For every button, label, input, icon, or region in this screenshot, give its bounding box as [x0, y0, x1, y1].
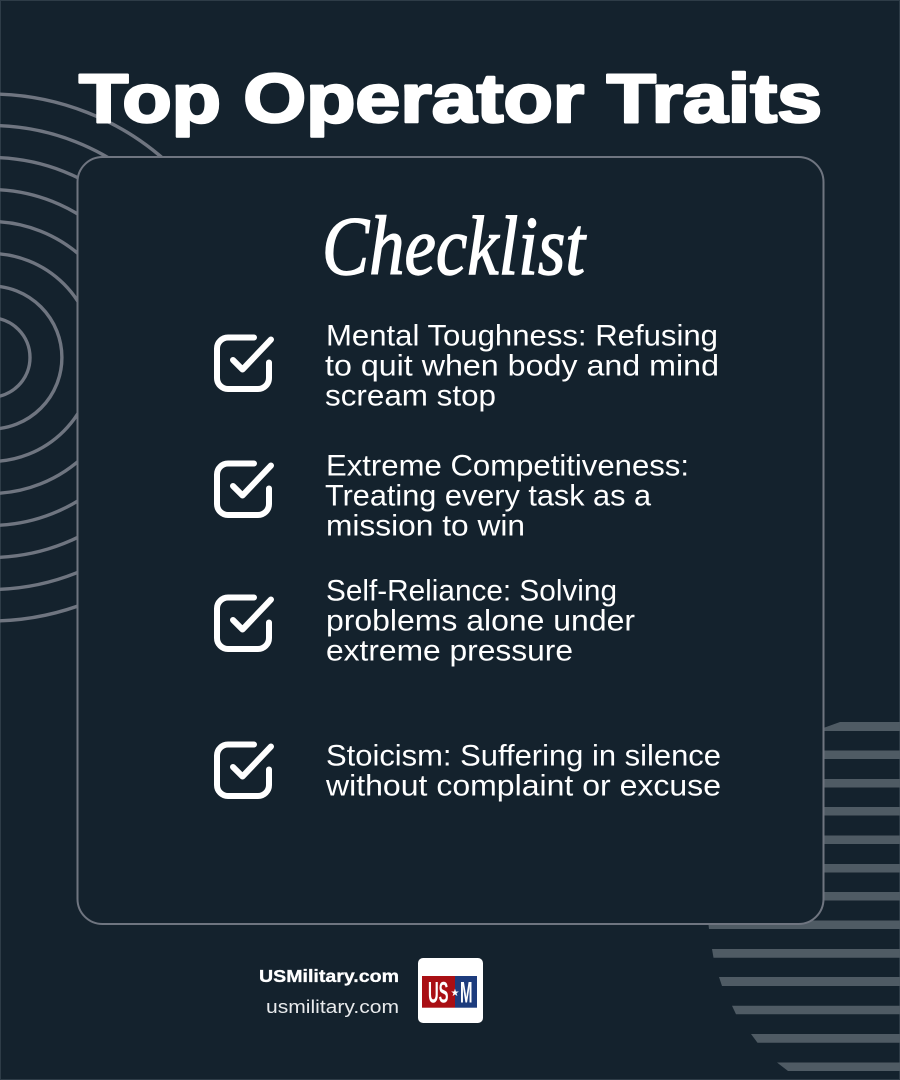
text: stoicism [325, 740, 721, 803]
icon: checkbox [217, 464, 271, 515]
text: mental toughness: to quit when body and mind [325, 350, 719, 383]
text: mental toughness: scream stop [325, 380, 496, 413]
text: self-reliance: problems alone under [326, 605, 635, 638]
text: extreme competitiveness: mission to win [326, 510, 525, 543]
text: extreme competitiveness: Extreme Competitiveness: [326, 450, 689, 483]
icon: checkbox [217, 598, 271, 649]
striped circle decoration [708, 722, 900, 1071]
text: stoicism: without complaint or excuse [325, 770, 721, 803]
text: mental toughness [325, 320, 719, 413]
item: stoicism [217, 740, 721, 803]
text: self-reliance: Self-Reliance: Solving [326, 575, 617, 608]
footer url: usmilitary.com [266, 997, 399, 1017]
title: Top Operator Traits [79, 60, 822, 137]
item: self-reliance [217, 575, 635, 668]
text: stoicism: Stoicism: Suffering in silence [326, 740, 721, 773]
checklist heading: Checklist [322, 200, 587, 293]
logo: US★M: US [428, 976, 448, 1010]
concentric arcs decoration [0, 94, 254, 621]
panel: checklist [78, 157, 824, 924]
icon: checkbox [217, 744, 271, 796]
item: mental toughness [217, 320, 719, 413]
text: extreme competitiveness [325, 450, 689, 543]
icon: checkbox [217, 338, 271, 389]
text: self-reliance: extreme pressure [326, 635, 573, 668]
text: extreme competitiveness: Treating every task as a [325, 480, 651, 513]
text: mental toughness: Mental Toughness: Refusing [326, 320, 718, 353]
item: extreme competitiveness [217, 450, 689, 543]
text: self-reliance [326, 575, 635, 668]
logo: US★M: ★ [451, 988, 460, 999]
footer brand name: USMilitary.com [259, 966, 399, 986]
logo: US★M: M [460, 976, 472, 1010]
logo: US★M [418, 958, 483, 1023]
